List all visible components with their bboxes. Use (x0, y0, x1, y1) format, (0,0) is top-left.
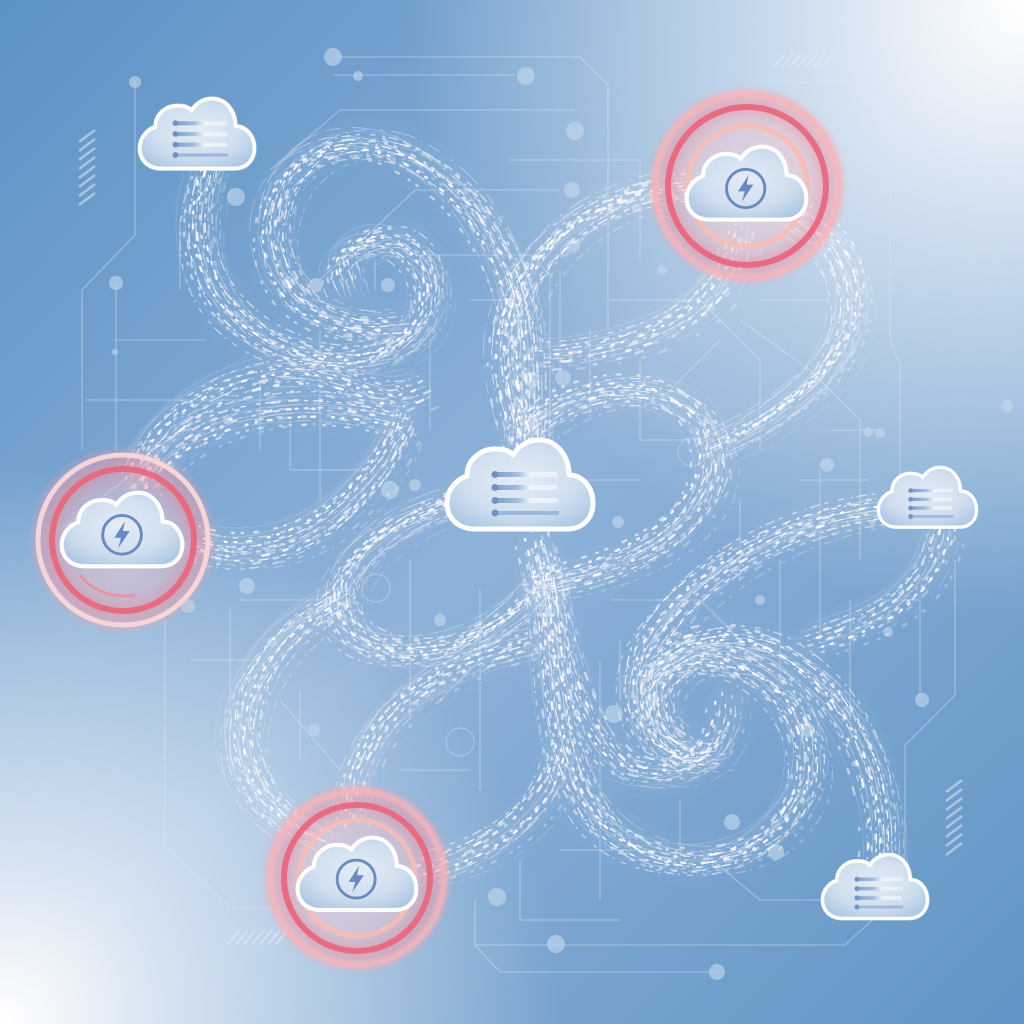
cloud: bottom, lightning (298, 838, 416, 910)
hatch marks (79, 54, 962, 944)
alert rings: top right (645, 84, 849, 288)
data stream: lower right large spiral (528, 553, 817, 867)
data stream: bottom-left arc (224, 594, 349, 846)
cloud: top left, list (140, 99, 254, 169)
data stream: left cloud upper arc (127, 364, 423, 480)
alert rings: bottom (259, 780, 455, 976)
data stream: right cloud swirl (625, 503, 892, 765)
data stream: left cloud lower arc (189, 410, 408, 561)
data stream: lower right inner spiral (525, 539, 735, 780)
cloud: bottom right, list (822, 854, 928, 919)
cloud: right, list (878, 467, 977, 527)
cloud: top right, lightning (687, 147, 806, 220)
data stream: right cloud short branch (802, 522, 948, 648)
alert rings: left (27, 444, 219, 636)
data stream: left cloud middle arc (134, 401, 401, 488)
data stream: top-right cloud to centre (493, 178, 707, 447)
data stream: top-right cloud right arc (703, 213, 861, 452)
data stream: bottom-right cloud arc (628, 633, 892, 862)
circuit board lines (60, 57, 955, 972)
cloud: left, lightning (62, 493, 182, 566)
data stream: bottom cloud upper branch (342, 637, 538, 823)
extra dispersed stream strands (118, 127, 963, 886)
data stream: top-left cloud spiral (185, 165, 440, 367)
cloud: centre, list (447, 440, 593, 529)
data stream: top-right cloud lower branch (534, 228, 746, 362)
data stream: bottom cloud right branch (412, 742, 568, 878)
data stream: centre right loop (518, 383, 724, 592)
data streams (127, 136, 948, 878)
data stream: centre cloud outer loop (259, 136, 539, 447)
data stream: centre left loop (326, 498, 547, 659)
